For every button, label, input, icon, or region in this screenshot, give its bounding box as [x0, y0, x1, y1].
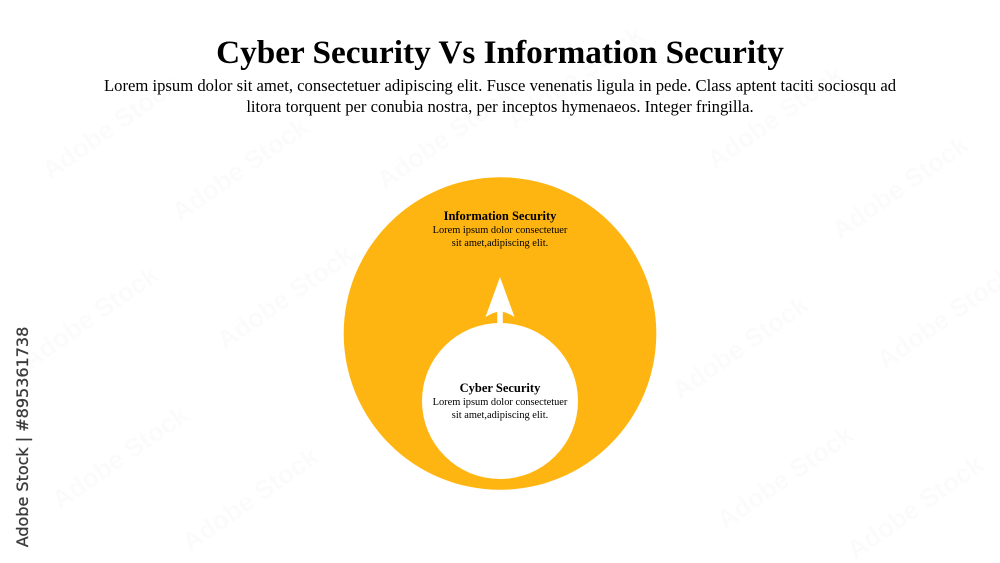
watermark pattern: Adobe Stock [211, 239, 359, 355]
subtitle paragraph: Lorem ipsum dolor sit amet, consectetuer adipiscing elit. Fusce venenatis ligula in pede. Class aptent taciti sociosqu ad [104, 76, 896, 95]
label: cyber security: sit amet,adipiscing elit. [452, 410, 548, 421]
watermark pattern: Adobe Stock [371, 79, 519, 195]
label: cyber security: Lorem ipsum dolor consectetuer [433, 397, 567, 408]
label: cyber security: Cyber Security [460, 381, 540, 395]
watermark pattern: Adobe Stock [701, 59, 849, 175]
watermark pattern: Adobe Stock [501, 19, 649, 135]
label: information security: Lorem ipsum dolor consectetuer [433, 225, 567, 236]
label: information security [432, 209, 568, 249]
watermark pattern: Adobe Stock [841, 449, 989, 563]
watermark pattern: Adobe Stock [826, 129, 974, 245]
outer circle: information security [344, 177, 656, 490]
watermark pattern: Adobe Stock [166, 111, 314, 227]
watermark pattern: Adobe Stock [36, 69, 184, 185]
arrow pointing up [486, 277, 514, 326]
watermark pattern: Adobe Stock [176, 441, 324, 557]
watermark pattern: Adobe Stock [711, 419, 859, 535]
watermark pattern: Adobe Stock [46, 399, 194, 515]
watermark pattern: Adobe Stock [16, 259, 164, 375]
subtitle paragraph: litora torquent per conubia nostra, per inceptos hymenaeos. Integer fringilla. [246, 97, 754, 116]
subtitle paragraph [104, 76, 896, 116]
stock id vertical text: Adobe Stock | #895361738 [13, 327, 32, 547]
label: cyber security [432, 381, 568, 421]
watermark pattern: Adobe Stock [666, 289, 814, 405]
title: Cyber Security Vs Information Security [216, 34, 784, 71]
label: information security: Information Security [444, 209, 556, 223]
inner circle: cyber security [422, 323, 578, 479]
label: information security: sit amet,adipiscing elit. [452, 238, 548, 249]
